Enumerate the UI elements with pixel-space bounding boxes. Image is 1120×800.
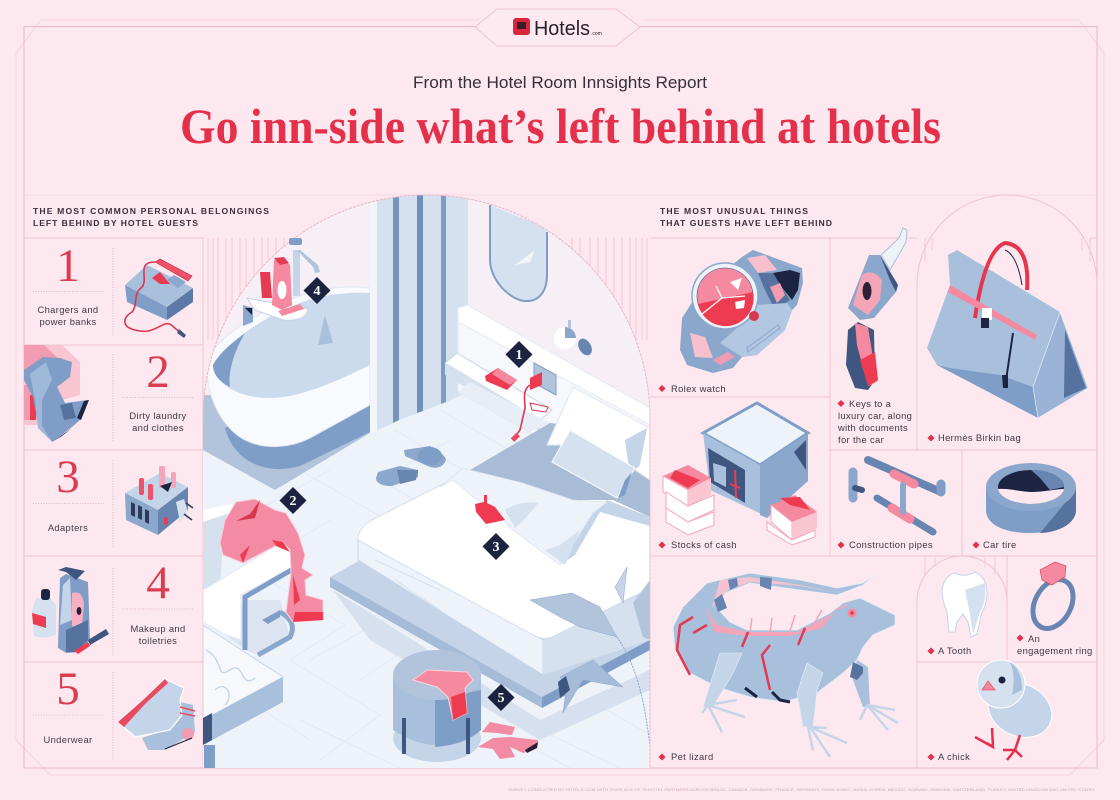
marker 2 (280, 487, 306, 514)
text: car keys: with documents (837, 422, 908, 433)
text: birkin bag: Hermès Birkin bag (938, 432, 1021, 443)
logo (475, 9, 640, 46)
panel: hotel room illustration (203, 195, 650, 768)
rank 5: Underwear (43, 734, 93, 745)
heading: most common: LEFT BEHIND BY HOTEL GUESTS (33, 218, 198, 228)
shelf (445, 353, 552, 432)
rank 4: 4 (146, 557, 170, 609)
floor pattern (215, 410, 650, 768)
rank 3 (48, 451, 88, 533)
rank 5: 5 (56, 663, 80, 715)
sweater on chair (220, 499, 323, 622)
icon: birkin bag (927, 243, 1088, 418)
marker 4 (304, 277, 330, 304)
heading: most unusual: THE MOST UNUSUAL THINGS (660, 206, 808, 216)
mirror (490, 205, 547, 301)
icon: underwear (118, 679, 195, 750)
text: stacks of cash: Stocks of cash (671, 539, 737, 550)
plant (530, 567, 650, 745)
text: pet lizard: Pet lizard (671, 751, 714, 762)
icon: adapter (125, 466, 193, 535)
adapter on bed (475, 495, 505, 524)
subtitle: From the Hotel Room Innsights Report (413, 74, 707, 92)
rank 5 (43, 663, 93, 745)
heading: most common: THE MOST COMMON PERSONAL BELONGINGS (33, 206, 269, 216)
logo: .com (591, 31, 602, 37)
marker 5: 5 (498, 691, 504, 706)
bathroom floor (203, 395, 370, 490)
rank 2: and clothes (132, 422, 184, 433)
ottoman (393, 650, 481, 762)
rank 2 (129, 346, 187, 433)
heading: most unusual: THAT GUESTS HAVE LEFT BEHIND (660, 218, 832, 228)
text: car tire: Car tire (983, 539, 1017, 550)
icon: tooth (942, 572, 987, 637)
heading: most unusual (660, 206, 832, 228)
icon: car keys (846, 228, 907, 390)
panel: most unusual items (658, 228, 1093, 762)
rank 3: Adapters (48, 522, 88, 533)
decorative stripes (208, 238, 1090, 575)
text: car keys: Keys to a (849, 398, 892, 409)
rank 4 (130, 557, 186, 646)
sheet (470, 423, 650, 517)
logo: Hotels (534, 17, 590, 40)
rank 3: 3 (56, 451, 80, 503)
text: car keys (837, 398, 912, 445)
power bank on shelf (485, 368, 517, 390)
marker 4: 4 (314, 284, 320, 299)
back wall (203, 246, 630, 412)
marble table (203, 625, 283, 768)
icon: chick (975, 660, 1061, 760)
footnote: SURVEY CONDUCTED BY HOTELS.COM WITH OVER 40% OF 75 HOTEL PARTNERS ACROSS BRAZIL, CANADA, DENMARK, FRANCE, GERMANY, HONG KONG, JAPAN, KOREA, MEXICO, NORWAY, SWEDEN, SWITZERLAND, TURKEY, UNITED KINGDOM AND UNITED STATES (508, 787, 1095, 792)
text: engagement ring: An (1028, 633, 1040, 644)
socket (534, 363, 556, 395)
chair (203, 504, 293, 655)
icon: engagement ring (1025, 562, 1081, 635)
text: car keys: luxury car, along (838, 410, 912, 421)
slippers (376, 446, 446, 486)
icon: stacks of cash (663, 465, 817, 545)
marker 2: 2 (290, 494, 296, 509)
icon: construction pipes (853, 460, 941, 532)
icon: laundry (24, 345, 89, 442)
mattress (358, 478, 650, 675)
text: a tooth: A Tooth (938, 645, 972, 656)
icon: toiletries (32, 567, 109, 654)
marker 3: 3 (492, 540, 500, 555)
icon: pet lizard (673, 573, 898, 757)
rank 1 (37, 240, 99, 327)
text: engagement ring: engagement ring (1017, 645, 1093, 656)
rank 1: 1 (56, 240, 80, 292)
title: Go inn-side what’s left behind at hotels (180, 98, 941, 154)
text: a chick: A chick (938, 751, 970, 762)
headboard (458, 304, 650, 434)
pillar (370, 195, 468, 434)
rank 1: power banks (39, 316, 97, 327)
icon: car tire (986, 463, 1076, 533)
marker 1: 1 (516, 348, 522, 363)
rank 4: Makeup and (130, 623, 186, 634)
panel: most common list (24, 240, 195, 760)
text: car keys: for the car (838, 434, 884, 445)
room arch outline (203, 195, 650, 768)
bed platform (330, 561, 650, 740)
heading: most common (33, 206, 269, 228)
wall lamp (554, 320, 592, 356)
pillows (547, 387, 650, 498)
floor (203, 392, 650, 768)
dotted dividers (33, 248, 193, 760)
icon: shelf and toiletries on tub (243, 257, 308, 326)
icon: faucet (289, 238, 320, 296)
rank 2: Dirty laundry (129, 410, 187, 421)
icon: rolex watch (680, 250, 803, 373)
rank 1: Chargers and (37, 304, 99, 315)
charger and cable (511, 372, 548, 442)
text: engagement ring (1016, 633, 1093, 656)
text: rolex watch: Rolex watch (671, 383, 726, 394)
rank 2: 2 (146, 346, 170, 398)
rank 4: toiletries (139, 635, 177, 646)
duvet fold (440, 468, 650, 565)
bathtub (207, 287, 370, 469)
icon: safe (703, 403, 808, 518)
marker 1 (506, 341, 532, 368)
text: construction pipes: Construction pipes (849, 539, 933, 550)
marker 3 (482, 533, 510, 560)
marker 5 (488, 684, 514, 711)
underwear on floor (478, 722, 538, 759)
icon: power bank (125, 259, 193, 338)
